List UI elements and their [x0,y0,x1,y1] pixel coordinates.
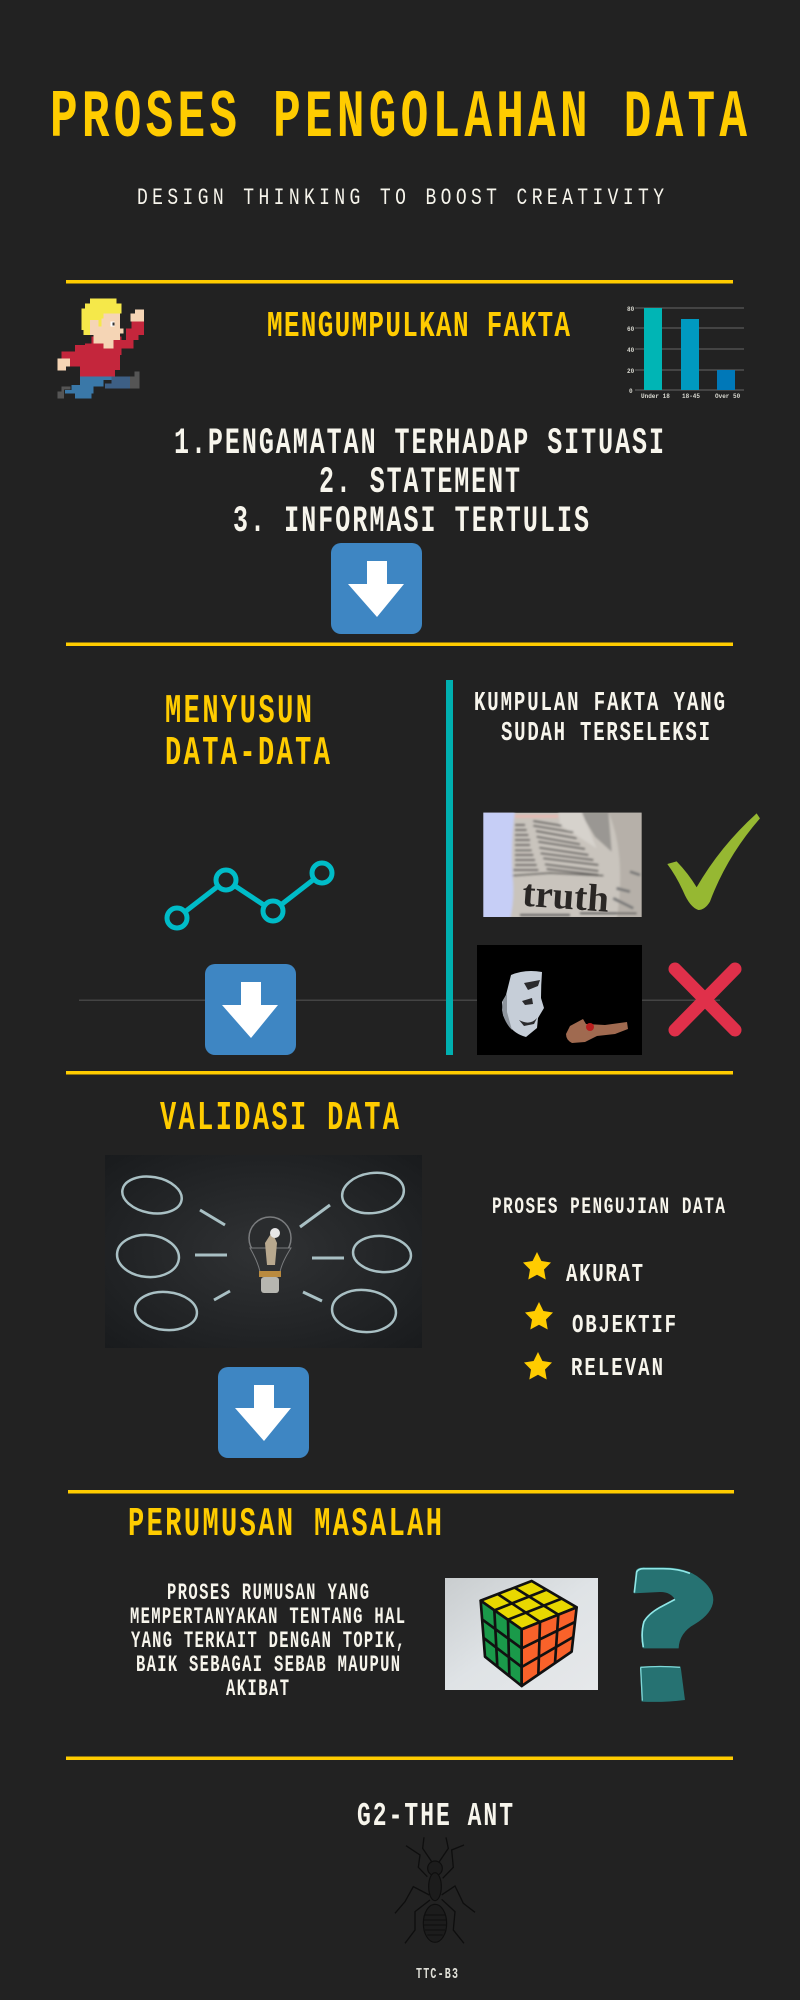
arrow 2 [205,964,296,1055]
heading: mengumpulkan fakta: MENGUMPULKAN FAKTA [267,307,570,348]
divider 3 [66,1071,733,1074]
icon: ant [395,1837,475,1943]
photo: light bulb on chalkboard [105,1155,422,1348]
divider 1 [66,280,733,284]
bar chart: 80 [627,306,635,313]
heading: validasi data: VALIDASI DATA [160,1096,399,1142]
divider 4 [68,1490,734,1494]
selected facts caption: KUMPULAN FAKTA YANG [474,688,725,719]
arrow 1 [331,543,422,634]
list of facts: 2. STATEMENT [319,460,520,504]
criterion: relevan [524,1352,663,1383]
heading: menyusun data-data [165,689,330,777]
photo: truth newspaper [480,810,643,921]
divider 2 [66,642,733,646]
team name: G2-THE ANT [357,1797,513,1835]
divider 5 [66,1756,733,1760]
heading: perumusan masalah: PERUMUSAN MASALAH [128,1502,442,1548]
list of facts: 3. INFORMASI TERTULIS [233,499,589,543]
bar chart: 18-45 [682,393,700,400]
thin grey rule [79,1000,720,1001]
criterion: objektif: OBJEKTIF [572,1310,676,1340]
bar chart: 20 [627,368,635,375]
list of facts: 1.PENGAMATAN TERHADAP SITUASI [174,421,664,465]
photo: mask and hand [477,945,642,1055]
title: PROSES PENGOLAHAN DATA [50,81,747,157]
icon: question mark [634,1567,713,1702]
selected facts caption [474,688,725,749]
bar chart: Over 50 [715,393,741,400]
icon: cross mark [675,969,735,1030]
bar chart [627,306,744,400]
icon: check mark [667,813,760,910]
criterion: relevan: RELEVAN [571,1353,663,1383]
photo: truth newspaper: truth [521,873,610,921]
validation label: PROSES PENGUJIAN DATA [492,1194,725,1220]
criterion: akurat: AKURAT [566,1259,643,1289]
paragraph: problem formulation: PROSES RUMUSAN YANG [167,1580,369,1606]
line chart icon [167,863,332,928]
paragraph: problem formulation: YANG TERKAIT DENGAN TOPIK, [131,1628,405,1654]
selected facts caption: SUDAH TERSELEKSI [501,718,710,749]
subtitle: DESIGN THINKING TO BOOST CREATIVITY [137,186,664,212]
paragraph: problem formulation: MEMPERTANYAKAN TENTANG HAL [130,1604,405,1630]
criterion: objektif [525,1302,676,1340]
paragraph: problem formulation: AKIBAT [226,1676,289,1702]
heading: menyusun data-data: MENYUSUN [165,689,312,735]
teal vertical divider [446,680,453,1055]
list of facts [174,421,664,543]
heading: menyusun data-data: DATA-DATA [165,731,330,777]
bar chart: 60 [627,326,635,333]
bar chart: 40 [627,347,635,354]
photo: rubik's cube [445,1578,598,1690]
bar chart: 0 [629,388,633,395]
paragraph: problem formulation: BAIK SEBAGAI SEBAB MAUPUN [136,1652,400,1678]
arrow 3 [218,1367,309,1458]
criterion: akurat [523,1252,643,1289]
team class: TTC-B3 [416,1965,458,1983]
icon: pixel runner [57,298,144,398]
paragraph: problem formulation [130,1580,405,1702]
bar chart: Under 18 [641,393,670,400]
